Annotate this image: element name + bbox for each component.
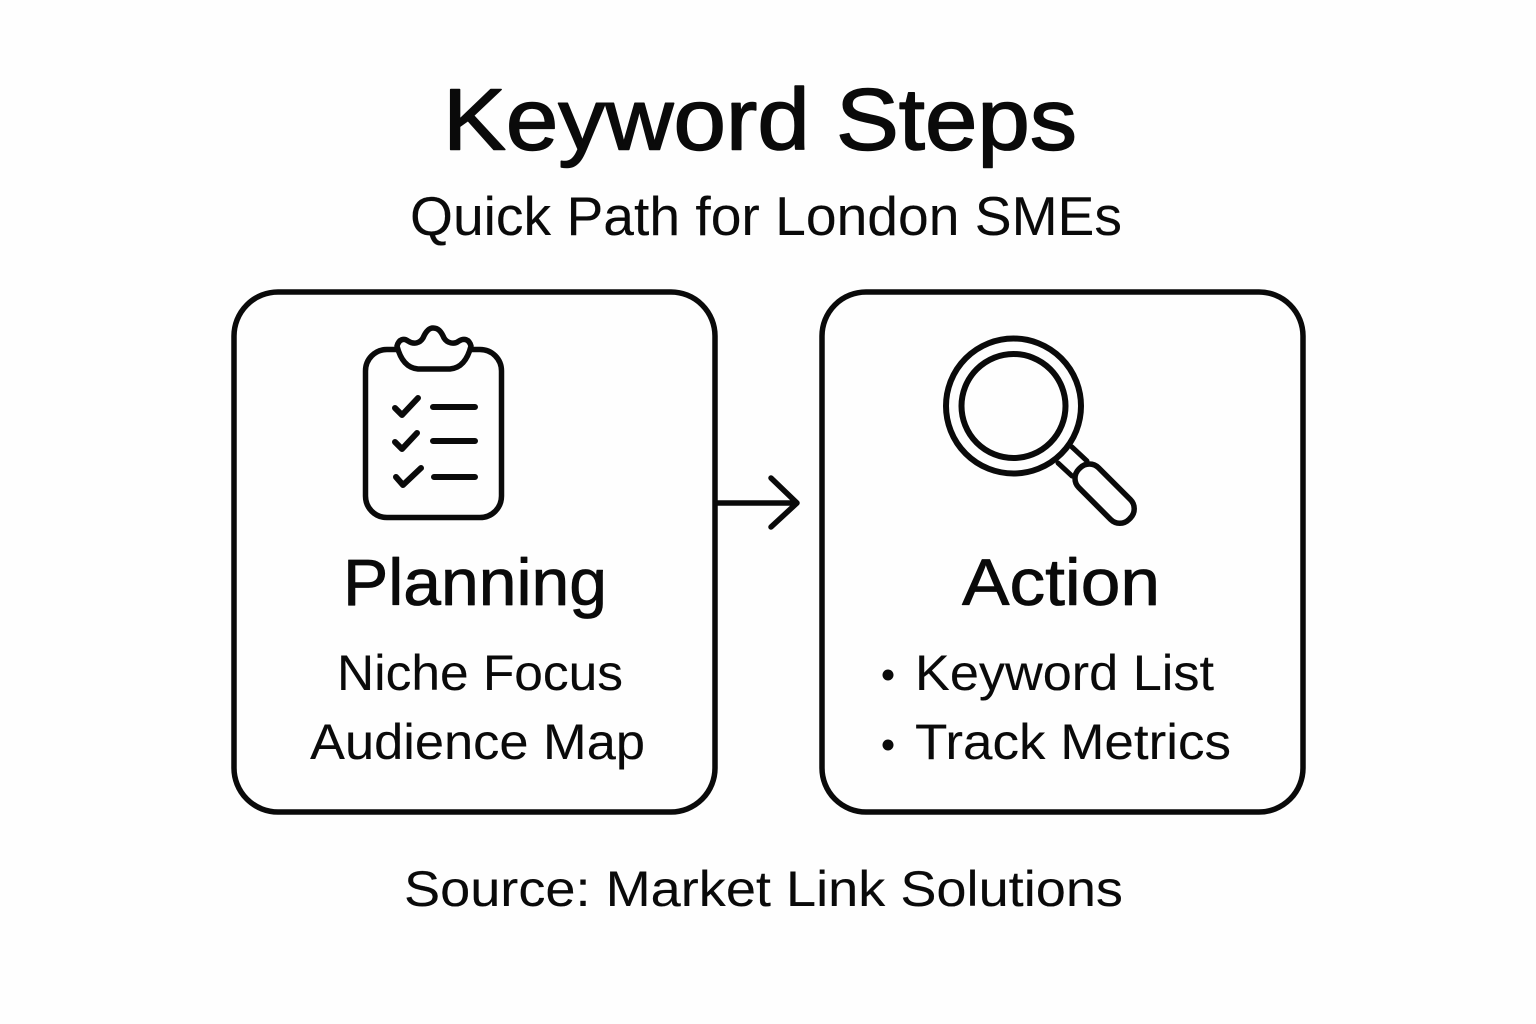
text: Niche Focus: Niche Focus [337, 645, 623, 701]
text: Audience Map: Audience Map [310, 714, 645, 770]
icon: clipboard checklist [366, 328, 502, 518]
title: Keyword Steps [443, 72, 1077, 168]
panel heading: Action: Action [962, 545, 1160, 619]
panel border [234, 292, 715, 812]
panel: action [822, 292, 1303, 812]
bullet item: Track Metrics: Track Metrics [915, 714, 1231, 770]
panel heading: Planning: Planning [343, 545, 607, 619]
subtitle: Quick Path for London SMEs [410, 185, 1122, 247]
panel: planning [234, 292, 715, 812]
bullet item: Keyword List: Keyword List [915, 645, 1214, 701]
panel border [822, 292, 1303, 812]
icon: magnifying glass [946, 338, 1140, 529]
source note: Source: Market Link Solutions [404, 861, 1123, 917]
arrow: planning to action [717, 478, 797, 527]
